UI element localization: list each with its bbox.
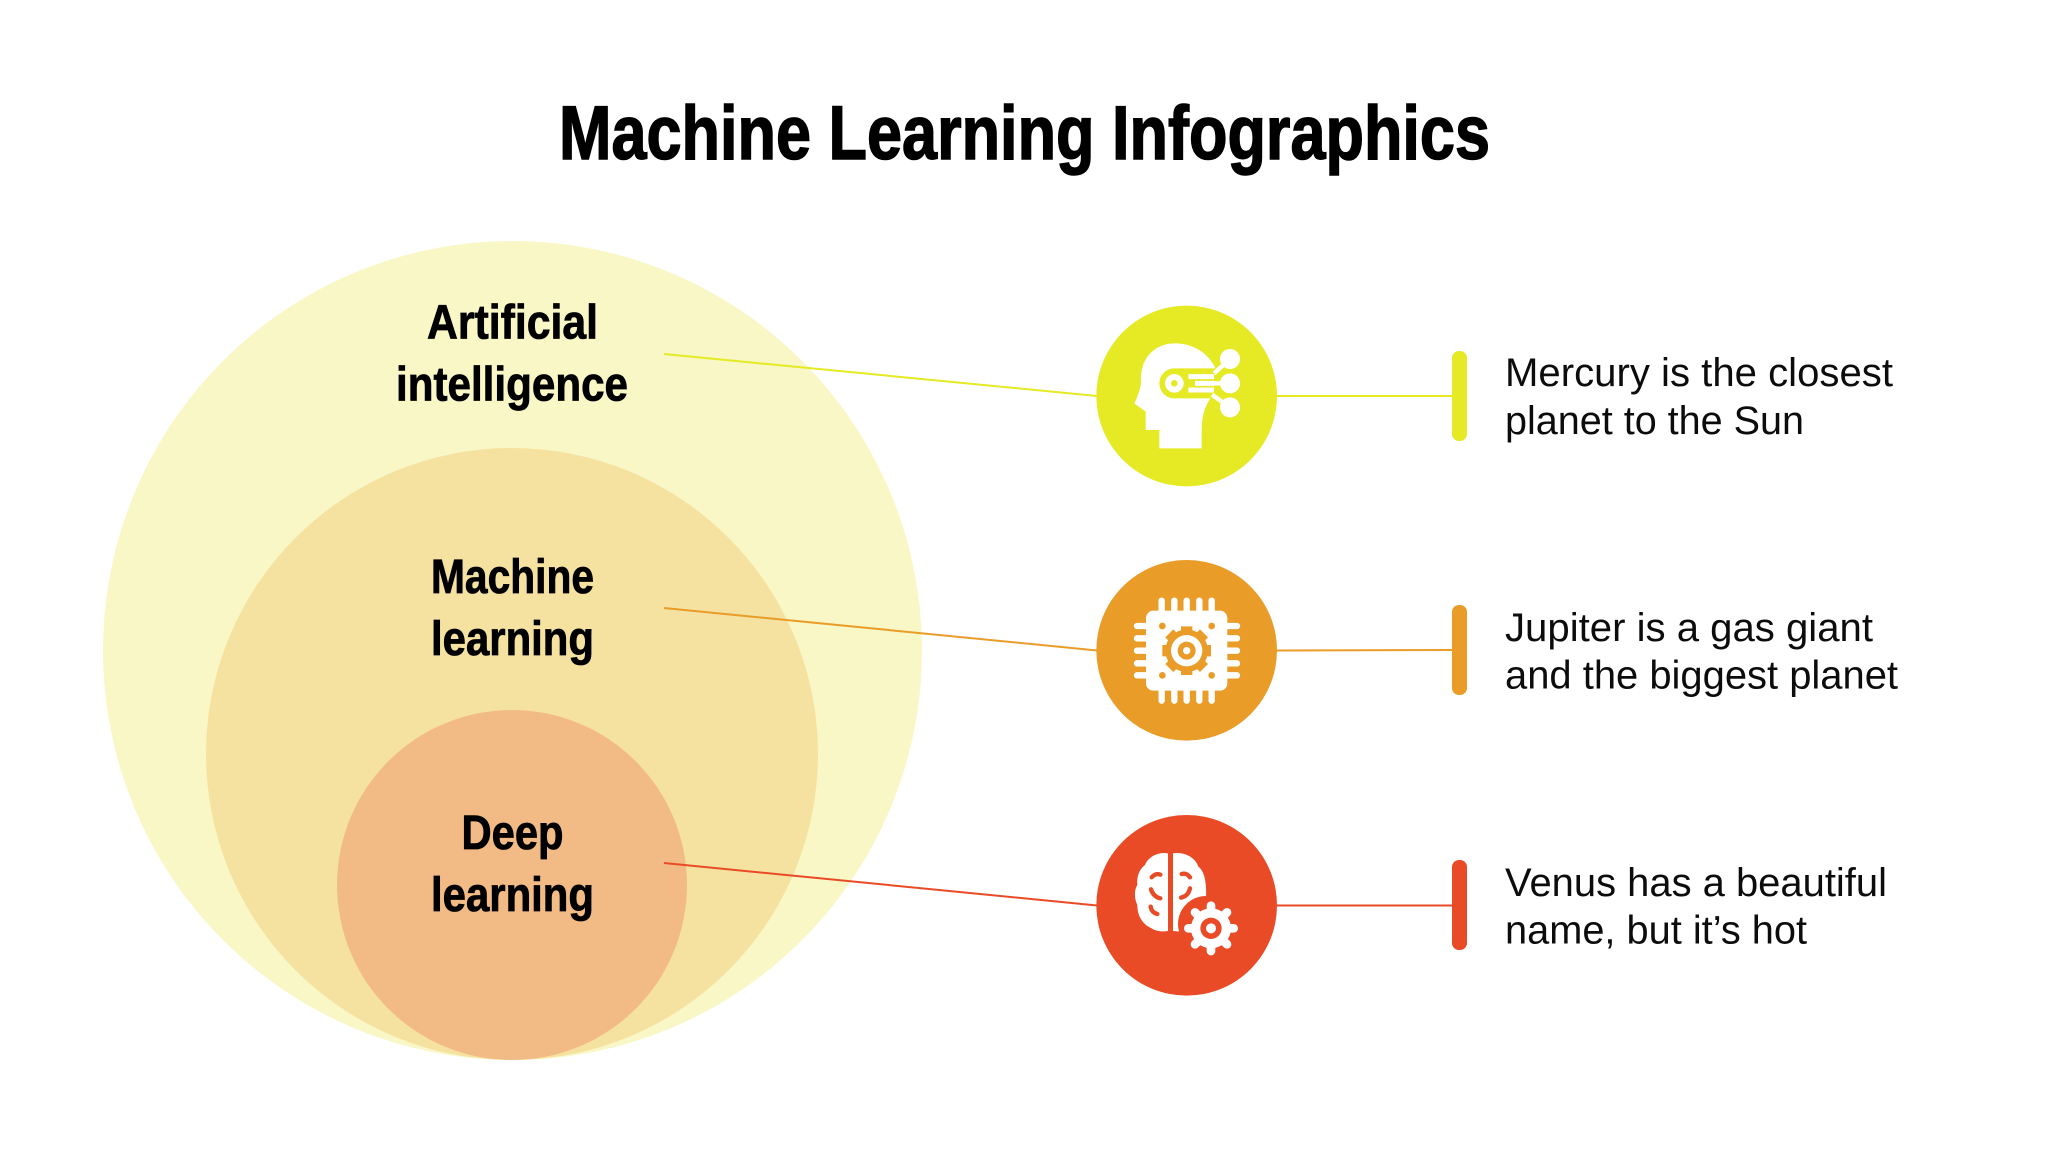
label: artificial intelligence [396,296,628,412]
marker bar: jupiter [1452,605,1467,695]
circle: machine learning [206,448,818,1060]
text: jupiter: Jupiter is a gas giant [1505,606,1873,650]
marker bar: venus [1452,860,1467,950]
label: machine learning: Machine [431,551,594,604]
text: venus: Venus has a beautiful [1505,861,1887,905]
label: deep learning: Deep [462,807,564,860]
label: deep learning: learning [431,869,594,922]
text: mercury [1505,351,1893,443]
label: machine learning [431,551,594,666]
text: mercury: Mercury is the closest [1505,351,1893,395]
label: artificial intelligence: Artificial [427,296,598,350]
circle: deep learning [337,710,687,1060]
text: venus [1505,861,1887,952]
connector: machine learning [664,608,1452,650]
connector: artificial intelligence [664,354,1452,396]
icon: brain with gear [1096,815,1277,996]
icon: chip with gear [1096,560,1277,741]
circle: artificial intelligence [103,241,922,1060]
marker bar: mercury [1452,351,1467,441]
label: machine learning: learning [431,613,594,666]
title: Machine Learning Infographics [559,91,1490,176]
text: mercury: planet to the Sun [1505,399,1804,443]
text: jupiter: and the biggest planet [1505,654,1898,698]
icon: AI head [1096,306,1277,486]
text: venus: name, but it’s hot [1505,908,1807,952]
connector: deep learning [664,863,1452,906]
text: jupiter [1505,606,1898,698]
label: artificial intelligence: intelligence [396,358,628,412]
nested circles diagram [103,241,922,1060]
label: deep learning [431,807,594,922]
